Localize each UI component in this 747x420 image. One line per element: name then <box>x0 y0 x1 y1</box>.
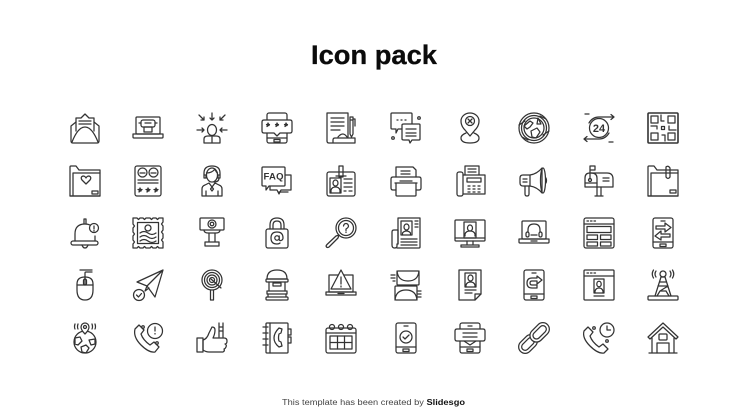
icon: document with portrait <box>459 270 481 300</box>
icon: map pin <box>461 113 479 143</box>
icon: magnifier question <box>326 218 356 248</box>
icon: review card <box>135 166 161 196</box>
icon: bell with badge <box>71 219 98 248</box>
icon: webcam <box>200 218 224 246</box>
icon: chat bubbles <box>391 113 420 143</box>
icon: fax machine <box>457 166 485 196</box>
icon: phone with return arrow <box>524 270 544 300</box>
icon: paper plane with check <box>134 270 163 300</box>
icon: post box <box>266 270 288 300</box>
title: Icon pack <box>311 40 438 70</box>
icon: megaphone <box>520 168 546 196</box>
icon: support agent <box>202 166 222 196</box>
icon: globe with pin <box>74 323 96 353</box>
icon: house <box>648 323 678 353</box>
icon: chain link <box>516 320 552 356</box>
icon grid <box>70 113 678 356</box>
icon: target lollipop <box>202 270 222 300</box>
icon: open envelope <box>71 114 99 143</box>
icon: phone with transfer arrows <box>653 218 673 248</box>
icon: phone call with alert <box>135 324 162 352</box>
icon: 24 hour arrows <box>584 114 614 142</box>
icon: picture stamp <box>133 218 163 248</box>
icon: folder with heart <box>70 166 100 196</box>
icon: FAQ bubbles <box>262 167 291 194</box>
icon: two envelopes <box>391 271 421 300</box>
icon: mailbox <box>585 166 613 196</box>
icon: phone call with clock <box>584 323 614 353</box>
icon: address book <box>263 323 291 353</box>
icon: id badge <box>327 166 355 196</box>
icon: browser layout <box>584 218 614 248</box>
icon: maze square <box>648 113 678 143</box>
icon: FAQ bubbles: FAQ <box>264 172 284 182</box>
icon: thumbs up <box>197 323 227 352</box>
icon: globe in rings <box>519 113 549 143</box>
icon: radio tower <box>648 270 678 300</box>
icon: computer mouse <box>77 270 93 300</box>
icon: laptop with headset <box>519 221 549 243</box>
icon: laptop warning <box>326 270 356 295</box>
icon: calendar <box>326 324 356 353</box>
icon: phone star rating <box>262 113 292 143</box>
icon: laptop robot <box>133 117 163 138</box>
icon: monitor with portrait <box>455 220 485 247</box>
icon: padlock with at sign <box>266 218 288 248</box>
icon: browser with portrait <box>584 270 614 300</box>
icon: folder with paperclip <box>648 166 678 196</box>
icon: person with arrows <box>197 113 227 143</box>
footer credit: This template has been created by Slidesgo <box>282 398 465 407</box>
icon: signed document and pen <box>327 113 355 143</box>
icon: printer <box>391 167 421 196</box>
icon: 24 hour arrows: 24 <box>593 123 606 135</box>
icon: phone with check <box>396 323 416 353</box>
icon: phone with envelope <box>455 323 485 353</box>
icon: newspaper with portrait <box>392 218 420 248</box>
